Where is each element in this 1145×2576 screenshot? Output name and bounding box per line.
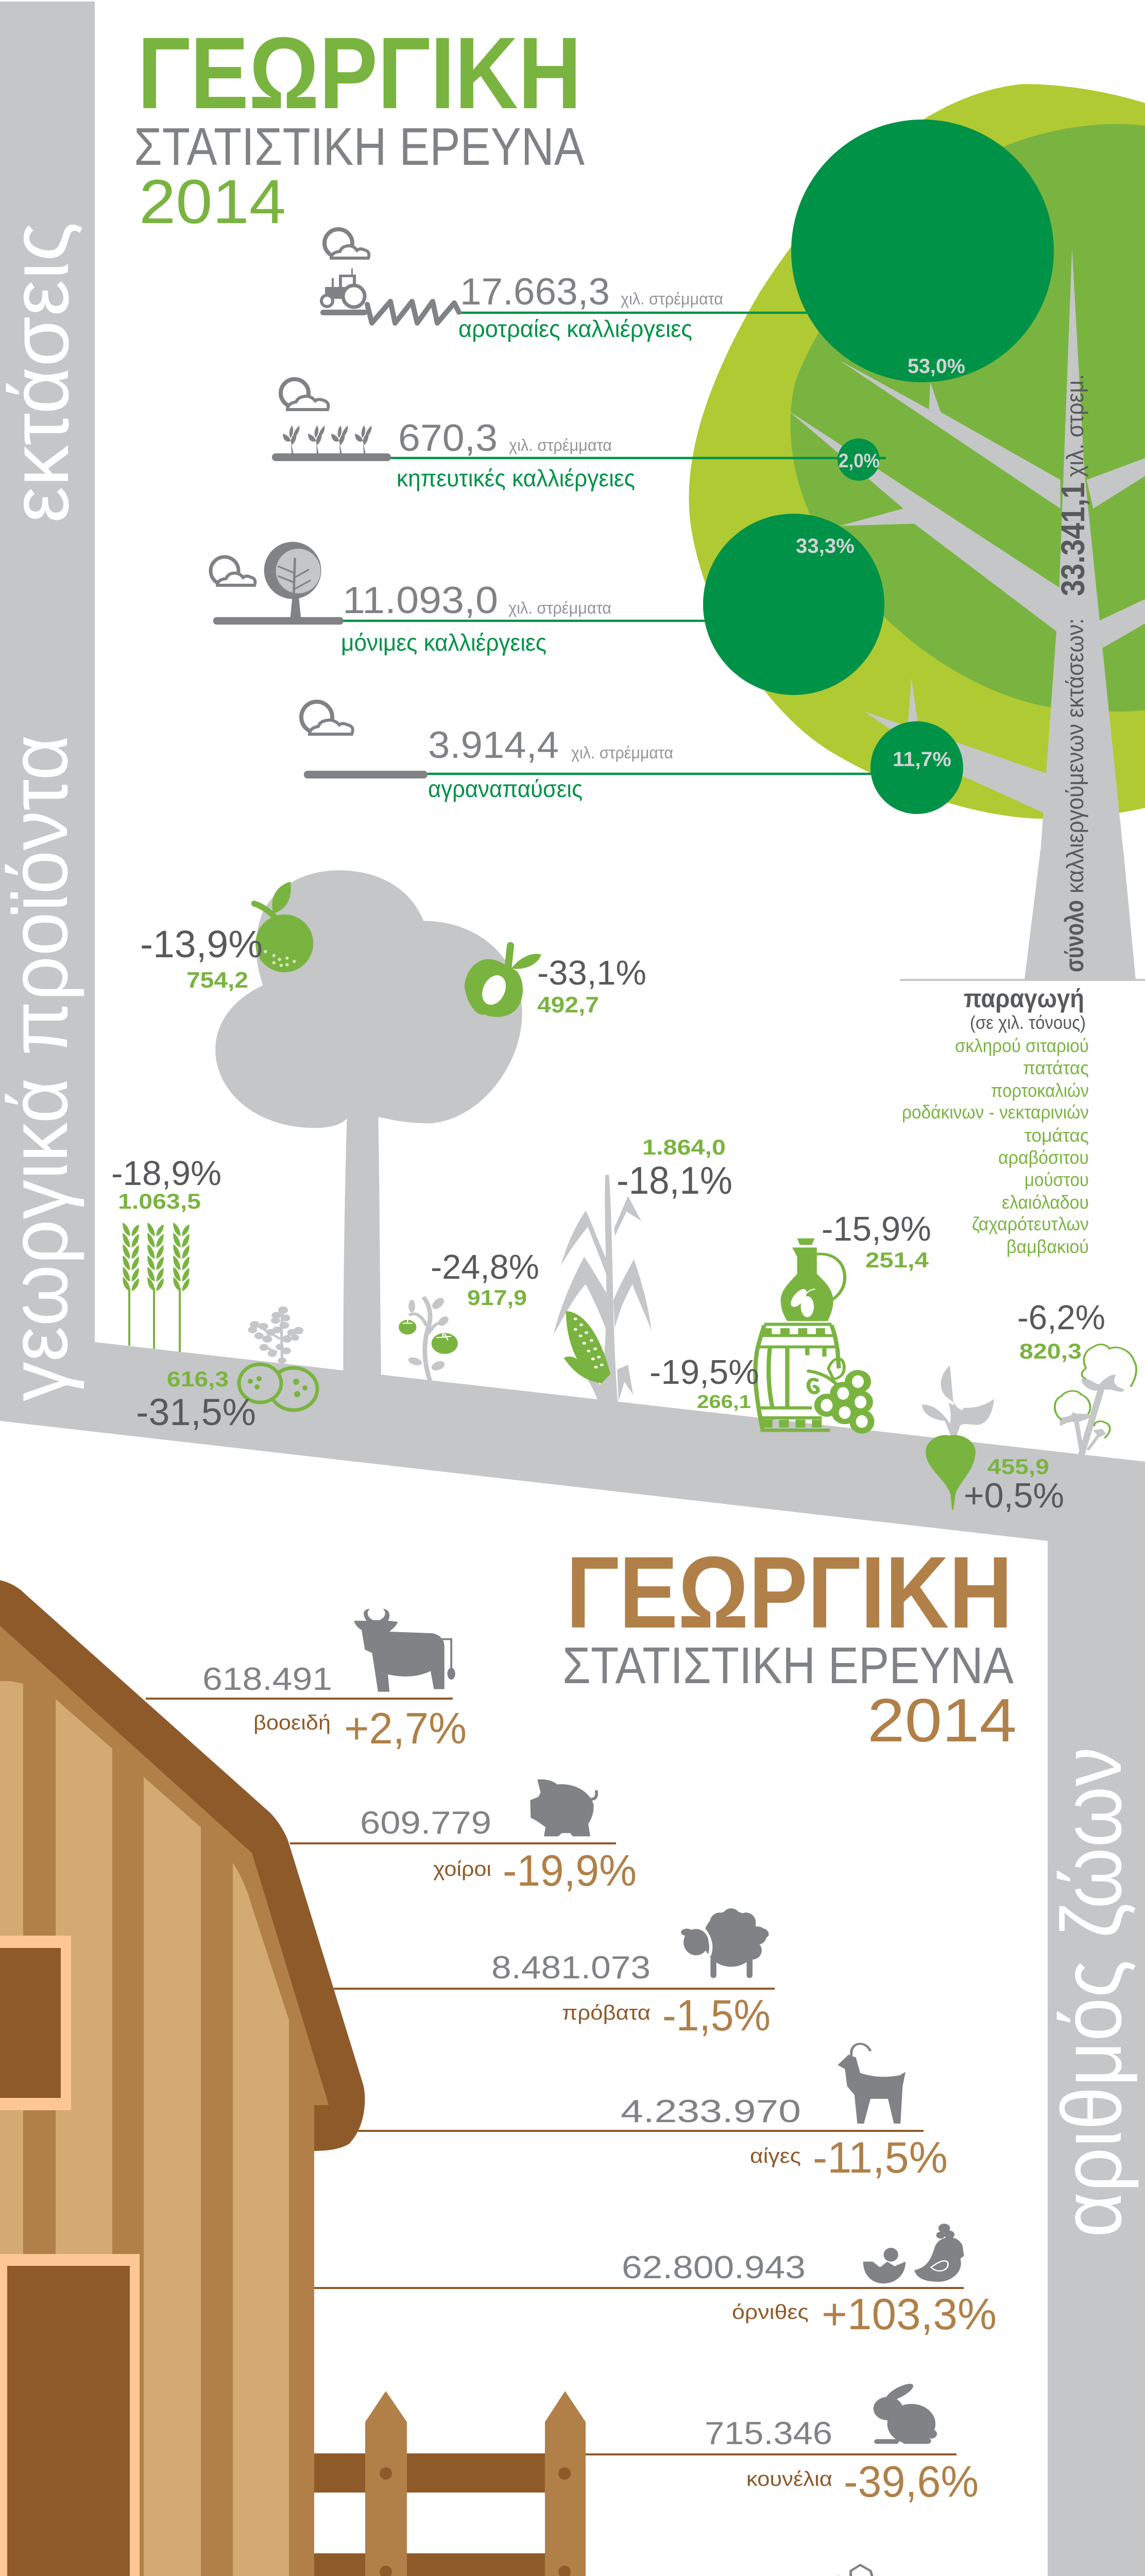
row 1 text: χιλ. στρέμματα <box>621 290 723 308</box>
subtitle: ΣΤΑΤΙΣΤΙΚΗ ΕΡΕΥΝΑ <box>562 1637 1014 1694</box>
stat: pigs <box>360 1805 637 1895</box>
row 3 text: μόνιμες καλλιέργειες <box>341 629 546 656</box>
title block: livestock <box>562 1535 1017 1755</box>
circle: αγραναπαύσεις 11,7% <box>870 721 963 814</box>
icon: orange <box>254 882 313 972</box>
stat: corn <box>617 1135 732 1202</box>
circle: κηπευτικές 2,0%: 2,0% <box>839 450 880 472</box>
production list: αραβόσιτου <box>998 1147 1089 1168</box>
production list: ελαιόλαδου <box>1002 1192 1089 1213</box>
stat: cotton: -6,2% <box>1017 1298 1105 1337</box>
stat: sheep <box>491 1950 771 2040</box>
year: 2014 <box>139 166 286 236</box>
stat: peaches: -33,1% <box>537 954 646 992</box>
stat: tomatoes <box>431 1248 539 1310</box>
production list: μούστου <box>1024 1169 1089 1190</box>
circle: αροτραίες 53,0% <box>791 120 1054 382</box>
row 1 text: 17.663,3 <box>460 271 610 313</box>
stat: poultry: +103,3% <box>822 2290 997 2339</box>
stat: poultry: 62.800.943 <box>622 2250 806 2285</box>
stat: durum wheat: 1.063,5 <box>118 1189 201 1213</box>
icon: wheat <box>123 1222 190 1352</box>
stat: olive oil: -15,9% <box>822 1210 931 1248</box>
stat: tomatoes: 917,9 <box>467 1285 527 1310</box>
title: ΓΕΩΡΓΙΚΗ <box>138 16 582 130</box>
stat: must: 266,1 <box>697 1391 751 1412</box>
stat: potatoes: -31,5% <box>136 1392 256 1433</box>
stat: cattle: βοοειδή <box>253 1711 331 1734</box>
stat: sheep: 8.481.073 <box>491 1950 651 1986</box>
row 3 text: 11.093,0 <box>343 580 498 621</box>
divider lines <box>146 1699 964 2576</box>
icon: cotton plant <box>1055 1345 1136 1455</box>
orchard tree <box>215 870 522 1376</box>
production list: (σε χιλ. τόνους) <box>970 1012 1086 1033</box>
trunk label: total cultivated area: καλλιεργούμενων εκτάσεων: <box>1062 618 1088 893</box>
production list: παραγωγή <box>964 984 1084 1013</box>
stat: corn: 1.864,0 <box>642 1135 726 1159</box>
stat: peaches <box>537 954 646 1018</box>
row 1 text <box>458 271 723 342</box>
circle: κηπευτικές 2,0% <box>838 438 886 481</box>
row 3 text: χιλ. στρέμματα <box>508 599 611 617</box>
row 1 text: αροτραίες καλλιέργειες <box>458 315 692 342</box>
title block: crops <box>134 16 585 236</box>
stat: oranges <box>140 923 263 993</box>
production list: βαμβακιού <box>1006 1236 1089 1257</box>
barn <box>0 1580 365 2576</box>
stat: oranges: 754,2 <box>186 968 248 993</box>
icon: tomato plant <box>399 1296 458 1381</box>
icon: vegetable sprouts <box>272 426 391 461</box>
row 4 text: αγραναπαύσεις <box>428 775 583 802</box>
circle: αγραναπαύσεις 11,7%: 11,7% <box>893 748 951 771</box>
production list: πορτοκαλιών <box>991 1080 1089 1101</box>
stat: poultry: όρνιθες <box>732 2301 809 2324</box>
stat: peaches: 492,7 <box>537 992 599 1018</box>
trunk label: total cultivated area <box>1054 374 1091 972</box>
stat: sheep: πρόβατα <box>562 2002 651 2024</box>
icon: fallow ground bar <box>304 771 428 778</box>
stat: goats: 4.233.970 <box>621 2094 801 2129</box>
year: 2014 <box>867 1686 1017 1755</box>
icon: sun and cloud 3 <box>211 557 255 585</box>
stat: cattle: 618.491 <box>202 1662 332 1697</box>
circle: αροτραίες 53,0%: 53,0% <box>908 355 965 378</box>
stat: cotton <box>1017 1298 1105 1363</box>
barn window <box>0 1936 71 2110</box>
icon: sugar beet <box>922 1365 994 1510</box>
stat: rabbits: κουνέλια <box>746 2468 832 2490</box>
stat: corn: -18,1% <box>617 1159 732 1202</box>
stat: cattle <box>202 1662 467 1753</box>
stat: sheep: -1,5% <box>662 1991 771 2040</box>
row 2 text <box>397 417 635 492</box>
circle: μόνιμες 33,3%: 33,3% <box>796 535 855 557</box>
stat: olive oil: 251,4 <box>865 1248 929 1272</box>
stat: rabbits <box>705 2416 979 2506</box>
icon: sheep <box>681 1908 771 1978</box>
barn door <box>0 2254 140 2576</box>
icon: olive oil jar <box>781 1239 845 1321</box>
stat: rabbits: 715.346 <box>705 2416 832 2451</box>
stat: durum wheat <box>111 1154 221 1213</box>
stat: cotton: 820,3 <box>1019 1339 1082 1363</box>
row 4 text: 3.914,4 <box>428 724 559 766</box>
icon: rabbit <box>874 2381 937 2444</box>
trunk label: total cultivated area: 33.341,1 <box>1054 482 1091 596</box>
icon: corn plant <box>554 1175 652 1403</box>
icon: sun and cloud 1 <box>324 229 369 258</box>
icon: peach <box>465 946 541 1017</box>
icon: cow <box>354 1608 455 1692</box>
icon: barrel and grapes <box>755 1324 874 1434</box>
trunk label: total cultivated area: σύνολο <box>1060 900 1089 972</box>
production list: ροδάκινων - νεκταρινιών <box>902 1101 1089 1123</box>
stat: potatoes: 616,3 <box>167 1367 229 1391</box>
stat: must <box>650 1353 759 1412</box>
stat: potatoes <box>136 1367 256 1433</box>
icon: honeycomb and bee <box>812 2565 874 2576</box>
stat: cattle: +2,7% <box>344 1704 467 1753</box>
row 2 text: κηπευτικές καλλιέργειες <box>397 465 635 492</box>
production list: σκληρού σιταριού <box>955 1035 1089 1056</box>
stat: sugar beet: 455,9 <box>987 1454 1049 1479</box>
stat: goats <box>621 2094 948 2182</box>
icon: potato plant <box>248 1307 303 1364</box>
production list <box>902 984 1089 1257</box>
stat: pigs: χοίροι <box>433 1858 491 1880</box>
stat: olive oil <box>822 1210 931 1272</box>
production list: πατάτας <box>1023 1057 1089 1078</box>
icon: chick and hen <box>863 2224 964 2283</box>
stat: poultry <box>622 2250 997 2339</box>
icon: sun and cloud 4 <box>301 702 353 734</box>
stat: pigs: 609.779 <box>360 1805 491 1841</box>
icon: goat <box>838 2044 905 2124</box>
connector lines <box>343 313 886 774</box>
title: ΓΕΩΡΓΙΚΗ <box>566 1535 1013 1649</box>
icon: pig <box>530 1780 596 1836</box>
row 3 text <box>341 580 611 656</box>
production list: ζαχαρότευτλων <box>972 1213 1089 1234</box>
stat: sugar beet <box>964 1454 1064 1515</box>
stat: goats: αίγες <box>750 2145 801 2167</box>
circle: μόνιμες 33,3% <box>703 514 884 695</box>
row 4 text <box>428 724 673 802</box>
stat: tomatoes: -24,8% <box>431 1248 539 1286</box>
stat: durum wheat: -18,9% <box>111 1154 221 1193</box>
icon: permanent crop tree <box>213 542 344 624</box>
production list: τομάτας <box>1024 1125 1089 1146</box>
subtitle: ΣΤΑΤΙΣΤΙΚΗ ΕΡΕΥΝΑ <box>134 117 585 176</box>
row 4 text: χιλ. στρέμματα <box>571 743 673 762</box>
fence <box>314 2391 586 2576</box>
stat: goats: -11,5% <box>813 2133 948 2182</box>
stat: rabbits: -39,6% <box>844 2458 979 2506</box>
row 2 text: χιλ. στρέμματα <box>509 436 612 454</box>
stat: oranges: -13,9% <box>140 923 263 965</box>
row 2 text: 670,3 <box>398 417 498 459</box>
trunk label: total cultivated area: χιλ. στρεμ. <box>1062 374 1088 477</box>
icon: sun and cloud 2 <box>281 379 328 410</box>
big tree: cultivated areas total <box>689 84 1145 981</box>
side label: αριθμός ζώων: αριθμός ζώων <box>1044 1747 1139 2238</box>
icon: potatoes <box>239 1364 317 1410</box>
stat: sugar beet: +0,5% <box>964 1476 1064 1515</box>
stat: must: -19,5% <box>650 1353 759 1392</box>
icon: tractor ploughing <box>320 268 459 323</box>
stat: pigs: -19,9% <box>503 1846 637 1895</box>
